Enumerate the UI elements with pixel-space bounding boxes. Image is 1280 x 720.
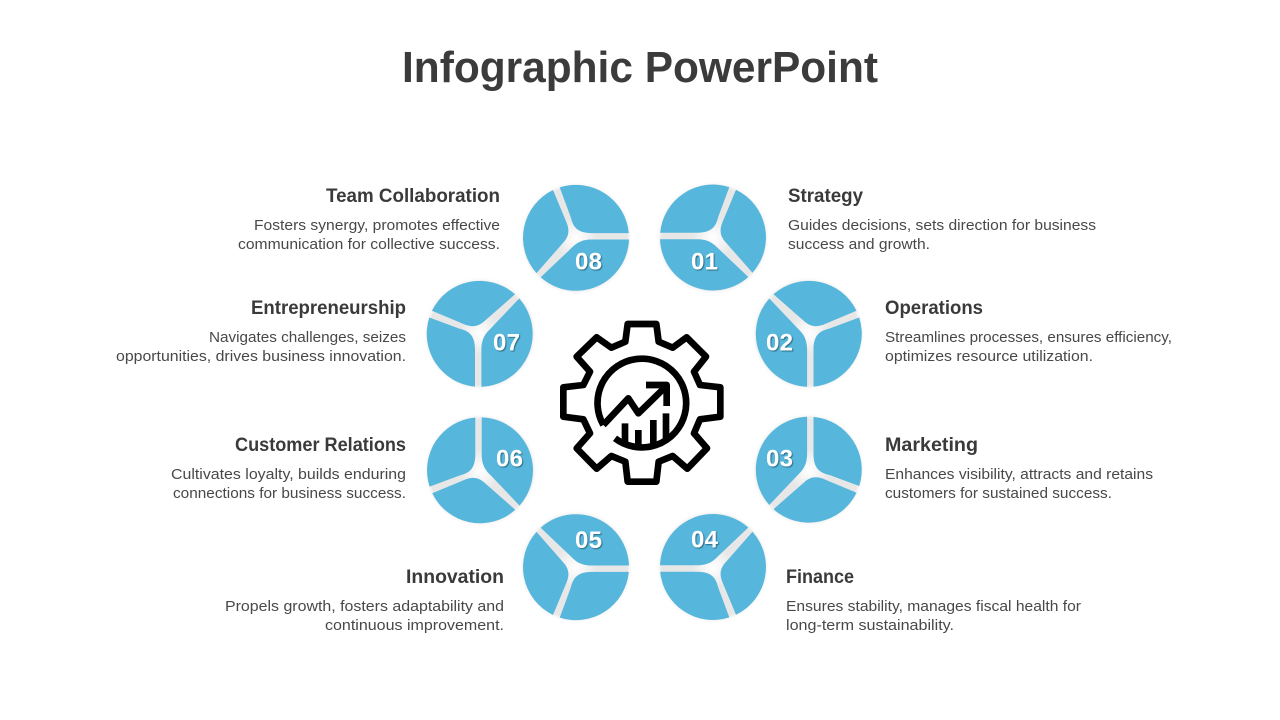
description 06: connections for business success.	[173, 485, 406, 502]
segmented circle 03	[756, 417, 862, 523]
heading 04: Finance	[786, 567, 854, 588]
segmented circle 04	[660, 514, 766, 620]
heading 01: Strategy	[788, 186, 863, 207]
segmented circle 05	[523, 514, 629, 620]
heading 07: Entrepreneurship	[251, 298, 406, 319]
node 06: Customer Relations	[171, 417, 533, 523]
node 01: Strategy	[660, 185, 1096, 290]
description 04: long-term sustainability.	[786, 617, 954, 634]
heading 02: Operations	[885, 298, 983, 319]
description 08	[238, 217, 500, 253]
description 03: customers for sustained success.	[885, 485, 1112, 502]
segmented circle 02	[756, 281, 862, 387]
segmented circle 08	[523, 185, 629, 291]
number 06: 06	[496, 446, 523, 473]
description 06	[171, 466, 406, 502]
description 01: Guides decisions, sets direction for business	[788, 217, 1096, 234]
description 04: Ensures stability, manages fiscal health for	[786, 598, 1081, 615]
number 04: 04	[691, 527, 719, 554]
number 01: 01	[691, 248, 718, 276]
description 03	[885, 466, 1153, 502]
number 08: 08	[575, 248, 602, 276]
number 07: 07	[493, 330, 520, 357]
number 02: 02	[766, 330, 793, 357]
heading 06: Customer Relations	[235, 435, 406, 456]
node 07: Entrepreneurship	[116, 281, 533, 387]
segmented circle 06	[427, 417, 533, 523]
description 04	[786, 598, 1081, 634]
description 05	[225, 598, 504, 634]
heading 03: Marketing	[885, 435, 978, 456]
title: Infographic PowerPoint	[402, 43, 878, 92]
node 03: Marketing	[756, 417, 1153, 523]
number 03: 03	[766, 446, 793, 473]
description 06: Cultivates loyalty, builds enduring	[171, 466, 406, 483]
description 02: Streamlines processes, ensures efficiency,	[885, 329, 1172, 346]
segmented circle 07	[427, 281, 533, 387]
node 08: Team Collaboration	[238, 185, 629, 291]
description 08: communication for collective success.	[238, 236, 500, 253]
description 02: optimizes resource utilization.	[885, 348, 1093, 365]
heading 05: Innovation	[406, 567, 504, 588]
node 02: Operations	[756, 281, 1172, 387]
description 05: continuous improvement.	[325, 617, 504, 634]
description 01: success and growth.	[788, 236, 930, 253]
description 08: Fosters synergy, promotes effective	[254, 217, 500, 234]
segmented circle 01	[660, 185, 766, 290]
description 07	[116, 329, 406, 365]
number 05: 05	[575, 527, 602, 554]
heading 08: Team Collaboration	[326, 186, 500, 207]
node 05: Innovation	[225, 514, 629, 634]
description 05: Propels growth, fosters adaptability and	[225, 598, 504, 615]
icon: gear with growth chart	[563, 324, 720, 482]
description 03: Enhances visibility, attracts and retains	[885, 466, 1153, 483]
description 02	[885, 329, 1172, 365]
description 07: opportunities, drives business innovation.	[116, 348, 406, 365]
description 01	[788, 217, 1096, 253]
description 07: Navigates challenges, seizes	[209, 329, 406, 346]
node 04: Finance	[660, 514, 1081, 634]
